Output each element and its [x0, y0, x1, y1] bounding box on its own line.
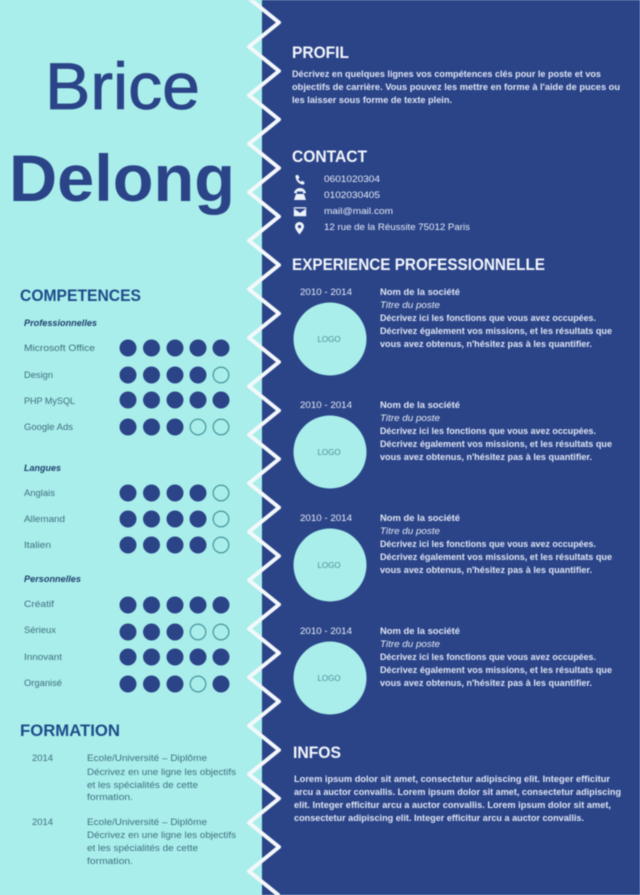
panel: experience entry 3: 2010 - 2014 [300, 513, 352, 523]
panel: experience entry 2: Titre du poste [380, 413, 440, 423]
panel: experience entry 4: 2010 - 2014 [300, 626, 352, 636]
panel: language skills: Langues [24, 463, 61, 473]
text block: education entry 2: formation. [87, 856, 133, 866]
panel: language skills: Italien [24, 540, 51, 550]
panel: language skills: Anglais [24, 488, 56, 498]
text block: education entry 1: Décrivez en une ligne les objectifs [87, 767, 237, 777]
panel: experience entry 3: Décrivez également vos missions, et les résultats que [380, 552, 612, 562]
icon: envelope [294, 207, 306, 216]
logo circle [294, 416, 366, 488]
panel: professional skills: Google Ads [24, 422, 74, 432]
text block: education entry 2: et les spécialités de cette [87, 843, 198, 853]
title: name: Delong [9, 141, 235, 215]
panel: experience entry 1: 2010 - 2014 [300, 287, 352, 297]
icon: location pin [295, 222, 304, 234]
panel: professional skills: PHP MySQL [24, 396, 75, 406]
panel: right main background [262, 0, 640, 895]
panel: language skills: Allemand [24, 514, 65, 524]
panel: experience entry 1 [294, 287, 612, 376]
text block: profile [292, 69, 620, 105]
text block: education entry 2: 2014 [32, 817, 53, 827]
panel: experience entry 4: Nom de la société [380, 626, 460, 636]
text block: infos: Lorem ipsum dolor sit amet, consectetur adipiscing elit. Integer efficitur [294, 774, 611, 784]
panel: experience entry 4: Titre du poste [380, 639, 440, 649]
panel: personal skills: Créatif [24, 599, 55, 609]
panel: experience entry 3 [294, 513, 612, 602]
heading: experience: EXPERIENCE PROFESSIONNELLE [292, 255, 545, 274]
text block: infos [294, 774, 621, 823]
panel: experience entry 3: Nom de la société [380, 513, 460, 523]
panel: experience entry 2: Nom de la société [380, 400, 460, 410]
logo circle [294, 528, 366, 602]
text block: profile: objectifs de carrière. Vous pouvez les mettre en forme à l'aide de puces ou [292, 82, 620, 92]
text block: education entry 2: Décrivez en une ligne les objectifs [87, 830, 237, 840]
panel: language skills [24, 463, 229, 554]
panel: contact details: mail@mail.com [324, 206, 393, 216]
panel: professional skills: Microsoft Office [24, 343, 95, 353]
logo circle: LOGO [317, 561, 341, 570]
panel: contact details [294, 174, 471, 234]
panel: contact details: 0102030405 [324, 190, 380, 200]
text block: education entry 1: Ecole/Université – Diplôme [87, 753, 207, 763]
text block: infos: consectetur adipiscing elit. Integer efficitur arcu a auctor convallis. [294, 813, 584, 823]
icon: landline phone [294, 188, 306, 200]
panel: experience entry 2: 2010 - 2014 [300, 400, 352, 410]
text block: education entry 1: formation. [87, 792, 133, 802]
panel: experience entry 1: Décrivez également vos missions, et les résultats que [380, 326, 612, 336]
heading: formation: FORMATION [20, 721, 120, 740]
heading: competences: COMPETENCES [20, 286, 141, 305]
panel: experience entry 4: Décrivez ici les fonctions que vous avez occupées. [380, 652, 596, 662]
panel: personal skills: Innovant [24, 652, 63, 662]
text block: profile: les laisser sous forme de texte plein. [292, 95, 452, 105]
panel: experience entry 3: Titre du poste [380, 526, 440, 536]
icon: mobile phone [295, 175, 305, 185]
panel: experience entry 2: vous avez obtenus, n'hésitez pas à les quantifier. [380, 452, 592, 462]
text block: infos: arcu a auctor convallis. Lorem ipsum dolor sit amet, consectetur adipiscing [294, 787, 621, 797]
logo circle: LOGO [317, 448, 341, 457]
panel: experience entry 4 [294, 626, 612, 714]
text block: infos: elit. Integer efficitur arcu a auctor convallis. Lorem ipsum dolor sit amet, [294, 800, 611, 810]
panel: experience entry 1: Nom de la société [380, 287, 460, 297]
title: name [9, 49, 235, 215]
panel: experience entry 4: vous avez obtenus, n'hésitez pas à les quantifier. [380, 678, 592, 688]
panel: experience entry 1: Titre du poste [380, 300, 440, 310]
panel: left sidebar background [0, 0, 262, 895]
text block: education entry 1: et les spécialités de cette [87, 780, 198, 790]
logo circle [294, 302, 366, 376]
panel: personal skills [24, 574, 230, 692]
panel: experience entry 2: Décrivez également vos missions, et les résultats que [380, 439, 612, 449]
panel: experience entry 1: Décrivez ici les fonctions que vous avez occupées. [380, 313, 596, 323]
logo circle: LOGO [317, 335, 341, 344]
text block: education entry 2: Ecole/Université – Diplôme [87, 817, 207, 827]
panel: personal skills: Sérieux [24, 625, 57, 635]
title: name: Brice [45, 49, 200, 123]
text block: profile: Décrivez en quelques lignes vos compétences clés pour le poste et vos [292, 69, 601, 79]
panel: experience entry 4: Décrivez également vos missions, et les résultats que [380, 665, 612, 675]
panel: contact details: 12 rue de la Réussite 75012 Paris [324, 222, 471, 232]
panel: experience entry 3: Décrivez ici les fonctions que vous avez occupées. [380, 539, 596, 549]
panel: professional skills [24, 318, 230, 436]
panel: experience entry 2 [294, 400, 612, 488]
panel: experience entry 1: vous avez obtenus, n'hésitez pas à les quantifier. [380, 339, 592, 349]
panel: professional skills: Design [24, 370, 53, 380]
panel: professional skills: Professionnelles [24, 318, 97, 328]
logo circle: LOGO [317, 674, 341, 683]
panel: personal skills: Personnelles [24, 574, 81, 584]
heading: contact: CONTACT [292, 147, 368, 166]
text block: education entry 1 [32, 753, 237, 802]
panel: experience entry 2: Décrivez ici les fonctions que vous avez occupées. [380, 426, 596, 436]
panel: contact details: 0601020304 [324, 174, 380, 184]
panel: personal skills: Organisé [24, 678, 62, 688]
panel: experience entry 3: vous avez obtenus, n'hésitez pas à les quantifier. [380, 565, 592, 575]
text block: education entry 2 [32, 817, 237, 866]
zigzag divider [249, 0, 279, 895]
logo circle [294, 642, 366, 714]
text block: education entry 1: 2014 [32, 753, 53, 763]
heading: infos: INFOS [293, 743, 341, 762]
heading: profil: PROFIL [292, 43, 349, 62]
